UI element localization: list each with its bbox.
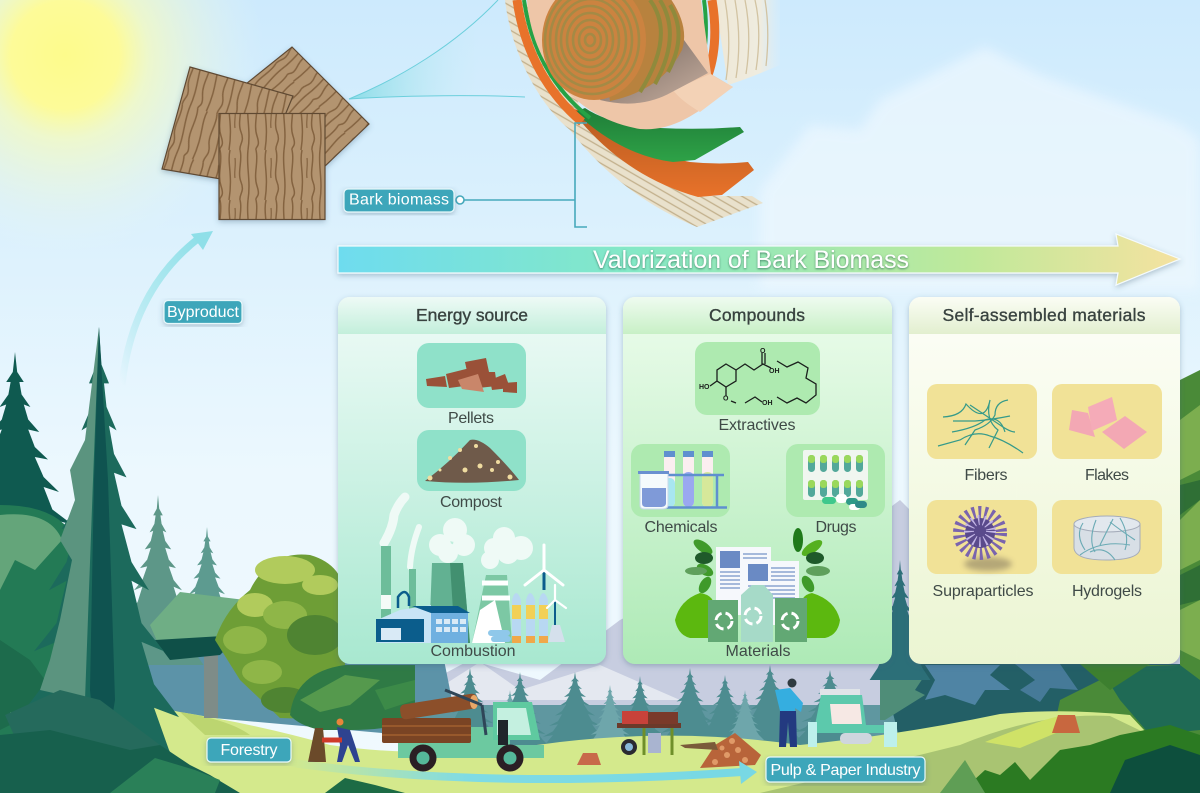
mid background trees <box>112 495 241 665</box>
heading: Compounds <box>709 305 805 325</box>
log growth rings <box>542 0 646 100</box>
heading: Energy source <box>416 305 528 325</box>
pellets tile <box>417 343 526 408</box>
heading: Self-assembled materials <box>942 305 1146 325</box>
extractives tile: O <box>723 396 729 402</box>
forestry truck <box>382 690 544 772</box>
background mountains <box>395 500 1200 720</box>
left broadleaf tree <box>0 505 84 793</box>
tree stump <box>577 753 601 765</box>
drugs tile <box>786 444 885 517</box>
blue-leaf tree behind <box>150 592 245 718</box>
compost tile <box>417 430 526 491</box>
right edge trees <box>1040 370 1200 793</box>
left small spruce <box>0 352 99 602</box>
combustion plants illustration <box>376 497 566 643</box>
panel: self-assembled materials <box>909 297 1180 664</box>
log pile <box>680 733 761 768</box>
right tree stump <box>1052 715 1080 733</box>
pellets label: Pellets <box>448 410 494 427</box>
materials illustration <box>675 528 840 642</box>
fibers label: Fibers <box>964 467 1008 484</box>
log side <box>594 0 684 101</box>
green ring <box>524 0 706 118</box>
dark tree near worker <box>290 665 415 762</box>
sun <box>0 0 265 255</box>
label: byproduct: Byproduct <box>167 304 240 321</box>
fibers tile <box>927 384 1037 459</box>
flakes label: Flakes <box>1085 467 1129 484</box>
flow arrow: forestry to pulp and paper <box>285 761 757 784</box>
hydrogels tile <box>1052 500 1162 574</box>
wood ring <box>527 0 733 129</box>
bottom foliage <box>0 725 1200 793</box>
orange inner bark strip <box>570 108 754 197</box>
ground <box>120 700 1200 793</box>
clouds <box>760 47 1200 290</box>
compost label: Compost <box>440 494 503 511</box>
chemicals label: Chemicals <box>644 519 718 536</box>
main valorization arrow <box>338 234 1180 285</box>
chemicals tile <box>631 444 730 517</box>
zoom fan from bark squares <box>349 0 535 99</box>
ring lip <box>673 74 733 112</box>
bark squares <box>162 47 369 220</box>
panel body <box>909 297 1180 664</box>
tall spruce <box>4 327 194 793</box>
panel header band <box>338 297 606 334</box>
panel: energy source <box>338 297 606 664</box>
tall narrow spruce in panel gap <box>870 560 930 680</box>
worker with chainsaw <box>322 718 360 762</box>
label: forestry <box>207 738 291 762</box>
tube outer bark <box>715 0 780 85</box>
orange ring <box>517 0 715 122</box>
label: byproduct <box>164 300 242 324</box>
drugs label: Drugs <box>816 519 856 536</box>
splitter machine <box>617 711 681 755</box>
panel: compounds <box>623 297 892 664</box>
bark biomass connector <box>456 123 587 227</box>
arrow title: Valorization of Bark Biomass <box>593 246 909 274</box>
label: pulp and paper industry: Pulp & Paper Industry <box>770 762 920 779</box>
label: bark biomass <box>344 189 454 212</box>
byproduct arrow <box>122 231 213 385</box>
extractives tile: OH <box>769 368 780 375</box>
label: pulp and paper industry <box>766 757 925 782</box>
extractives tile: HO <box>699 384 710 391</box>
wood stem cross-section <box>505 0 780 227</box>
supraparticles label: Supraparticles <box>932 583 1034 600</box>
shadowed hole <box>600 40 708 104</box>
panel header band <box>909 297 1180 334</box>
worker at paper machine <box>775 678 803 747</box>
extractives label: Extractives <box>718 417 796 434</box>
flakes tile <box>1052 384 1162 459</box>
panel body <box>338 297 606 664</box>
background forest band <box>60 640 1200 750</box>
extractives tile: O <box>760 348 766 355</box>
yellow-green tree <box>215 554 345 720</box>
combustion label: Combustion <box>430 643 516 660</box>
hydrogels label: Hydrogels <box>1072 583 1142 600</box>
arrow shape <box>338 234 1180 285</box>
materials label: Materials <box>726 643 790 660</box>
supraparticles tile <box>927 500 1037 574</box>
extractives tile: OH <box>762 400 772 407</box>
green cambium strip <box>575 108 744 162</box>
outer bark left and lower strip <box>505 0 763 227</box>
panel body <box>623 297 892 664</box>
label: forestry: Forestry <box>220 742 278 759</box>
label: bark biomass: Bark biomass <box>349 192 449 208</box>
paper machine <box>808 689 897 747</box>
panel header band <box>623 297 892 334</box>
extractives tile <box>695 342 820 415</box>
